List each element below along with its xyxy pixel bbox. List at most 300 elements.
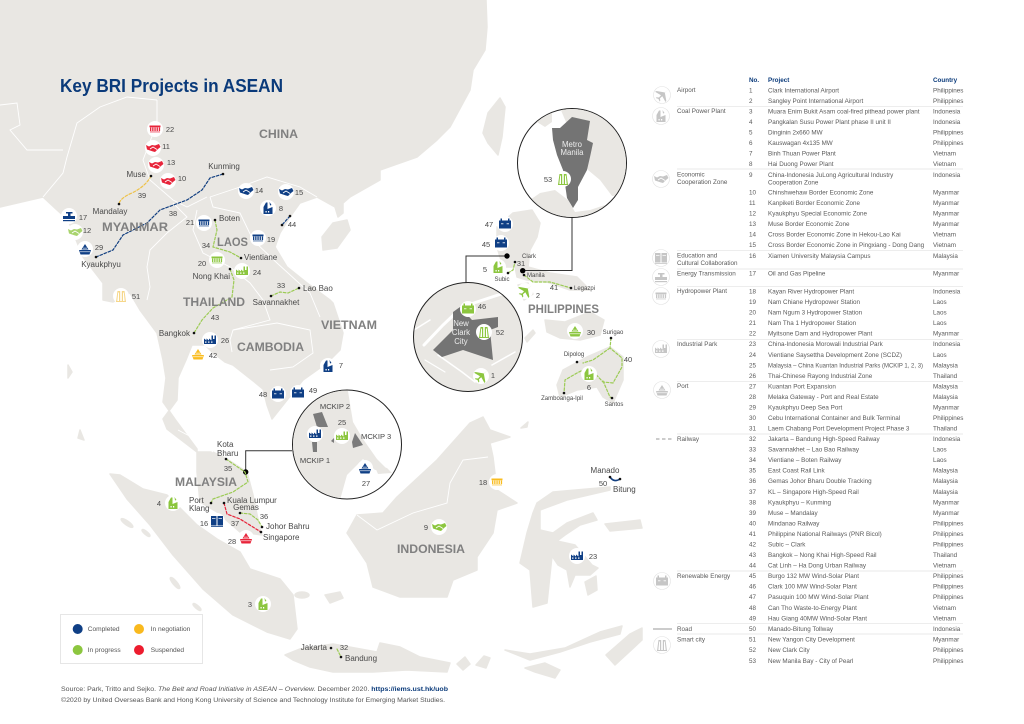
project number labels: 7 bbox=[339, 361, 343, 370]
category: Renewable Energy: Philippines bbox=[933, 594, 963, 601]
category: Economic Cooperation Zone: Muse Border Economic Zone bbox=[768, 221, 850, 228]
icon 42 bbox=[190, 346, 206, 362]
inset: Metro Manila: Manila bbox=[561, 148, 584, 157]
source note: Source: Park, Tritto and Sejko. The Belt and Road Initiative in ASEAN – Overview. December 2020. https://iems.ust.hk/uob bbox=[61, 686, 448, 693]
category: Energy Transmission: Oil and Gas Pipeline bbox=[768, 271, 826, 278]
category: Coal Power Plant: Indonesia bbox=[933, 108, 961, 116]
city labels: Johor Bahru bbox=[266, 522, 310, 531]
category: Economic Cooperation Zone: Chinshwehaw Border Economic Zone bbox=[768, 190, 874, 196]
category: Railway: Myanmar bbox=[933, 510, 959, 517]
city labels: Kuala Lumpur bbox=[227, 496, 277, 505]
Java bbox=[285, 643, 450, 672]
category: Railway: 34 bbox=[749, 457, 757, 464]
category: Railway: 36 bbox=[749, 478, 757, 485]
category: Port bbox=[654, 382, 963, 432]
project number labels: 24 bbox=[253, 268, 261, 277]
city labels: Manila bbox=[527, 273, 545, 279]
country borders bbox=[0, 97, 488, 530]
category: Economic Cooperation Zone: 12 bbox=[749, 211, 757, 218]
category: Railway: Laos bbox=[933, 446, 947, 454]
category: Coal Power Plant: Philippines bbox=[933, 140, 963, 147]
project number labels: 25 bbox=[338, 418, 346, 427]
category: Energy Transmission: Myanmar bbox=[933, 271, 959, 278]
category: Economic Cooperation Zone: Myanmar bbox=[933, 211, 959, 218]
route number labels: 50 bbox=[599, 479, 607, 488]
Taiwan bbox=[483, 98, 505, 155]
inset: MCKIP Kuantan: MCKIP 2 bbox=[320, 402, 350, 411]
category: Railway: 39 bbox=[749, 510, 757, 517]
category: Coal Power Plant: Pangkalan Susu Power Plant phase II unit II bbox=[768, 119, 891, 126]
project number labels: 29 bbox=[95, 243, 103, 252]
category: Railway: Mindanao Railway bbox=[768, 520, 820, 528]
icon 3 bbox=[255, 596, 271, 612]
category: Airport: Philippines bbox=[933, 88, 963, 94]
category: Hydropower Plant: 18 bbox=[749, 288, 757, 296]
icon 18 bbox=[489, 474, 505, 490]
category: Port: Thailand bbox=[933, 426, 958, 432]
category: Railway: Laos bbox=[933, 457, 947, 464]
icon: book bbox=[652, 250, 670, 266]
project icons: in progress (green) bbox=[67, 171, 597, 612]
category: Hydropower Plant: Myanmar bbox=[933, 330, 959, 338]
category: Economic Cooperation Zone: 9 bbox=[749, 172, 753, 179]
route number labels: 38 bbox=[169, 209, 177, 218]
category: Railway: Malaysia bbox=[933, 468, 958, 474]
city labels: Bharu bbox=[217, 449, 238, 458]
category: Renewable Energy: 48 bbox=[749, 605, 757, 612]
project number labels: 17 bbox=[79, 213, 87, 222]
category: Coal Power Plant: Vietnam bbox=[933, 151, 956, 158]
category: Industrial Park: Industrial Park bbox=[677, 341, 718, 348]
legend: Completed bbox=[88, 626, 120, 633]
project number labels: 9 bbox=[424, 523, 428, 532]
project icons: suspended (red) bbox=[145, 121, 254, 546]
category: Port: Kyaukphyu Deep Sea Port bbox=[768, 404, 842, 412]
category: Economic Cooperation Zone: 15 bbox=[749, 242, 757, 249]
category: Port: Kuantan Port Expansion bbox=[768, 384, 836, 390]
category: Coal Power Plant: 7 bbox=[749, 151, 753, 158]
category: Railway: Kyaukphyu – Kunming bbox=[768, 500, 832, 506]
route number labels: 41 bbox=[550, 283, 558, 292]
country labels: INDONESIA bbox=[397, 544, 465, 556]
city labels: Manado bbox=[591, 466, 620, 475]
category: Industrial Park: Laos bbox=[933, 352, 947, 359]
category: Smart city: Myanmar bbox=[933, 636, 959, 644]
icon 16 bbox=[209, 513, 225, 529]
project number labels: 4 bbox=[157, 499, 161, 508]
category: Renewable Energy: Philippines bbox=[933, 584, 963, 590]
city labels: Savannakhet bbox=[253, 298, 300, 307]
category: Education and Cultural Collaboration bbox=[652, 250, 958, 267]
category: Port: Port bbox=[677, 383, 689, 390]
category: Airport: Clark International Airport bbox=[768, 88, 839, 94]
connector to Manila bbox=[523, 217, 572, 270]
project number labels: 12 bbox=[83, 226, 91, 235]
icon 19 bbox=[250, 230, 266, 246]
category: Smart city: Philippines bbox=[933, 647, 963, 654]
category: Port: 28 bbox=[749, 394, 757, 401]
table header: No. bbox=[749, 77, 759, 84]
category: Road: 50 bbox=[749, 626, 757, 633]
icon 17 bbox=[61, 208, 77, 224]
category: Education and Cultural Collaboration: Xiamen University Malaysia Campus bbox=[768, 253, 871, 260]
project number labels: 8 bbox=[279, 204, 283, 213]
project number labels: 30 bbox=[587, 328, 595, 337]
city markers bbox=[95, 173, 621, 658]
category: Railway: Gemas Johor Bharu Double Tracking bbox=[768, 478, 872, 485]
category: Industrial Park: Malaysia – China Kuantan Industrial Parks (MCKIP 1, 2, 3) bbox=[768, 362, 923, 370]
inset: Metro Manila: Metro bbox=[562, 140, 583, 149]
category: Industrial Park: Malaysia bbox=[933, 362, 958, 370]
Borneo bbox=[347, 417, 517, 597]
category: Airport bbox=[654, 86, 963, 105]
icon 6 bbox=[581, 366, 597, 382]
city labels: Boten bbox=[219, 214, 240, 223]
city labels: Bandung bbox=[345, 654, 377, 663]
category: Economic Cooperation Zone: Myanmar bbox=[933, 221, 959, 228]
category: Industrial Park bbox=[652, 340, 961, 380]
category: Railway: Cat Linh – Ha Dong Urban Railway bbox=[768, 562, 867, 570]
project number labels: 49 bbox=[309, 386, 317, 395]
project number labels: 53 bbox=[544, 175, 552, 184]
project number labels: 52 bbox=[496, 328, 504, 337]
country labels: CAMBODIA bbox=[237, 342, 304, 354]
city labels: Bitung bbox=[613, 485, 636, 494]
icon 51 bbox=[113, 288, 129, 304]
category: Renewable Energy: Philippines bbox=[933, 573, 963, 580]
category: Economic Cooperation Zone: Kyaukphyu Special Economic Zone bbox=[768, 211, 868, 218]
icon 12 bbox=[67, 224, 83, 240]
category: Coal Power Plant: 5 bbox=[749, 130, 753, 136]
mainland Asia bbox=[0, 0, 487, 535]
icon: hydropower bbox=[652, 288, 670, 304]
icon 30 bbox=[567, 323, 583, 339]
city labels: Subic bbox=[494, 277, 510, 283]
category: Smart city: 53 bbox=[749, 658, 757, 665]
project number labels: 22 bbox=[166, 125, 174, 134]
category: Port: Malaysia bbox=[933, 384, 958, 390]
category: Railway: Jakarta – Bandung High-Speed Railway bbox=[768, 436, 881, 443]
country labels: CHINA bbox=[259, 129, 298, 141]
table header: Country bbox=[933, 77, 958, 84]
category: Airport: 1 bbox=[749, 88, 753, 94]
category: Education and Cultural Collaboration: Malaysia bbox=[933, 253, 958, 260]
icon 1 bbox=[473, 368, 489, 384]
category: Industrial Park: Vientiane Saysettha Development Zone (SCDZ) bbox=[768, 352, 902, 359]
icon 46 bbox=[460, 301, 476, 317]
icon: road line bbox=[653, 628, 672, 630]
category: Economic Cooperation Zone: Indonesia bbox=[933, 172, 961, 179]
category: Railway: Philippine National Railways (PNR Bicol) bbox=[768, 531, 882, 538]
category: Coal Power Plant: Indonesia bbox=[933, 119, 961, 126]
icon: ship bbox=[654, 382, 670, 398]
route number labels: 39 bbox=[138, 191, 146, 200]
inset: MCKIP Kuantan: MCKIP 1 bbox=[300, 456, 330, 465]
category: Smart city: New Yangon City Development bbox=[768, 636, 855, 644]
category: Railway: 37 bbox=[749, 489, 757, 496]
project number labels: 26 bbox=[221, 336, 229, 345]
inset: New Clark City: Clark bbox=[452, 328, 470, 337]
project number labels: 51 bbox=[132, 292, 140, 301]
project number labels: 10 bbox=[178, 174, 186, 183]
category: Economic Cooperation Zone: Vietnam bbox=[933, 242, 956, 249]
category: Education and Cultural Collaboration: Cultural Collaboration bbox=[677, 260, 738, 267]
project icons: completed (blue) bbox=[61, 183, 585, 564]
project number labels: 18 bbox=[479, 478, 487, 487]
project number labels: 21 bbox=[186, 218, 194, 227]
inset: New Clark City: New bbox=[453, 319, 469, 328]
project number labels: 14 bbox=[255, 186, 263, 195]
category: Road bbox=[653, 626, 961, 633]
route number labels: 31 bbox=[517, 259, 525, 268]
table header: Project bbox=[768, 77, 790, 84]
Sumatra bbox=[110, 474, 297, 639]
icon 7 bbox=[320, 358, 336, 374]
category: Coal Power Plant: Kauswagan 4x135 MW bbox=[768, 140, 833, 147]
category: Smart city: Philippines bbox=[933, 658, 963, 665]
country labels: VIETNAM bbox=[321, 320, 377, 332]
project number labels: 48 bbox=[259, 390, 267, 399]
category: Coal Power Plant: Hai Duong Power Plant bbox=[768, 161, 834, 168]
country labels: LAOS bbox=[217, 237, 248, 249]
route number labels: 32 bbox=[340, 643, 348, 652]
icon 52 bbox=[476, 324, 492, 340]
route number labels: 44 bbox=[288, 220, 296, 229]
city labels: Singapore bbox=[263, 533, 300, 542]
project number labels: 46 bbox=[478, 302, 486, 311]
icon 26 bbox=[202, 332, 218, 348]
category: Port: 30 bbox=[749, 415, 757, 422]
lesser islands bbox=[457, 626, 642, 678]
city labels: Mandalay bbox=[93, 207, 127, 216]
icon 4 bbox=[165, 495, 181, 511]
category: Port: Cebu International Container and Bulk Terminal bbox=[768, 415, 900, 422]
category: Industrial Park: Indonesia bbox=[933, 341, 961, 348]
category: Energy Transmission: 17 bbox=[749, 271, 757, 278]
category: Railway: Vietnam bbox=[933, 562, 956, 570]
icon 47 bbox=[497, 216, 513, 232]
category: Industrial Park: China-Indonesia Morowali Industrial Park bbox=[768, 341, 884, 348]
project number labels: 47 bbox=[485, 220, 493, 229]
project number labels: 20 bbox=[198, 259, 206, 268]
category: Coal Power Plant: 3 bbox=[749, 108, 753, 116]
icon: factory bbox=[652, 340, 670, 358]
category: Economic Cooperation Zone: 11 bbox=[749, 200, 756, 207]
icon 29 bbox=[77, 241, 93, 257]
icon 13 bbox=[148, 157, 164, 173]
category: Renewable Energy: 45 bbox=[749, 573, 757, 580]
icon 8 bbox=[260, 200, 276, 216]
category: Economic Cooperation Zone: Myanmar bbox=[933, 190, 959, 196]
route number labels: 37 bbox=[231, 519, 239, 528]
category: Railway: Subic – Clark bbox=[768, 542, 806, 548]
category: Railway: 41 bbox=[749, 531, 757, 538]
source note: ©2020 by United Overseas Bank and Hong Kong University of Science and Technology Institute for Emerging Market Studies. bbox=[61, 696, 445, 704]
category: Port: 29 bbox=[749, 404, 757, 412]
category: Railway: 33 bbox=[749, 446, 757, 454]
category: Economic Cooperation Zone: Economic bbox=[677, 172, 705, 178]
category: Airport: Sangley Point International Airport bbox=[768, 98, 863, 105]
category: Railway: Myanmar bbox=[933, 500, 959, 506]
route number labels: 40 bbox=[624, 355, 632, 364]
project number labels: 28 bbox=[228, 537, 236, 546]
category: Coal Power Plant: 4 bbox=[749, 119, 753, 126]
category: Renewable Energy: Can Tho Waste-to-Energy Plant bbox=[768, 605, 857, 612]
route number labels: 35 bbox=[224, 464, 232, 473]
icon 22 bbox=[147, 121, 163, 137]
city labels: Dipolog bbox=[564, 352, 584, 358]
category: Smart city: 51 bbox=[749, 636, 757, 644]
category: Coal Power Plant: Vietnam bbox=[933, 161, 956, 168]
category: Hydropower Plant: Nam Chiane Hydropower Station bbox=[768, 299, 861, 306]
category: Port: Melaka Gateway - Port and Real Estate bbox=[768, 394, 879, 401]
category: Renewable Energy: Clark 100 MW Wind-Solar Plant bbox=[768, 584, 857, 590]
category: Railway bbox=[656, 436, 963, 570]
category: Hydropower Plant: Nam Ngum 3 Hydropower Station bbox=[768, 310, 863, 316]
category: Railway: Railway bbox=[677, 436, 700, 443]
category: Smart city: New Manila Bay - City of Pearl bbox=[768, 658, 853, 665]
category: Railway: Bangkok – Nong Khai High-Speed Rail bbox=[768, 552, 877, 559]
category: Coal Power Plant bbox=[652, 108, 963, 168]
inset: New Clark City: City bbox=[454, 337, 468, 346]
category: Hydropower Plant: 19 bbox=[749, 299, 757, 306]
icon 49 bbox=[290, 385, 306, 401]
inset: MCKIP Kuantan: MCKIP 3 bbox=[361, 432, 391, 441]
city labels: Kota bbox=[217, 440, 234, 449]
country labels: PHILIPPINES bbox=[528, 304, 599, 316]
category: Railway: Savannakhet – Lao Bao Railway bbox=[768, 446, 860, 454]
category: Railway: Philippines bbox=[933, 520, 963, 528]
Philippine islands bbox=[497, 210, 590, 290]
category: Economic Cooperation Zone: Cooperation Zone bbox=[768, 180, 819, 186]
icon 28 bbox=[238, 530, 254, 546]
title: Key BRI Projects in ASEAN bbox=[60, 76, 283, 96]
category: Economic Cooperation Zone: Vietnam bbox=[933, 232, 956, 239]
icon 25 bbox=[334, 428, 350, 444]
city labels: Kyaukphyu bbox=[81, 260, 121, 269]
category: Hydropower Plant: 22 bbox=[749, 330, 757, 338]
route number labels: 33 bbox=[277, 281, 285, 290]
project number labels: 27 bbox=[362, 479, 370, 488]
category: Railway: 40 bbox=[749, 520, 757, 528]
category: Hydropower Plant: Laos bbox=[933, 320, 947, 327]
city labels: Santos bbox=[605, 402, 623, 408]
category: Economic Cooperation Zone: China-Indonesia JuLong Agricultural Industry bbox=[768, 172, 894, 179]
country labels bbox=[102, 129, 599, 556]
project table bbox=[652, 77, 963, 665]
category: Port: Laem Chabang Port Development Project Phase 3 bbox=[768, 426, 910, 432]
city labels: Lao Bao bbox=[303, 284, 333, 293]
inset: New Clark City bbox=[414, 253, 524, 392]
category: Hydropower Plant: 20 bbox=[749, 310, 757, 316]
icon: railway dashes bbox=[656, 438, 672, 440]
category: Education and Cultural Collaboration: Education and bbox=[677, 252, 718, 260]
category: Hydropower Plant: Indonesia bbox=[933, 288, 961, 296]
category: Industrial Park: 23 bbox=[749, 341, 757, 348]
legend: Suspended bbox=[151, 647, 184, 654]
category: Hydropower Plant: Nam Tha 1 Hydropower Station bbox=[768, 320, 857, 327]
category: Coal Power Plant: Muara Enim Bukit Asam coal-fired pithead power plant bbox=[768, 108, 920, 116]
category: Economic Cooperation Zone: 13 bbox=[749, 221, 757, 228]
table header bbox=[749, 77, 958, 84]
category: Education and Cultural Collaboration: 16 bbox=[749, 253, 757, 260]
icon: battery bbox=[654, 572, 670, 590]
icon 23 bbox=[569, 548, 585, 564]
category: Economic Cooperation Zone: 10 bbox=[749, 190, 757, 196]
category: Railway: KL – Singapore High-Speed Rail bbox=[768, 489, 859, 496]
category: Road: Manado-Bitung Tollway bbox=[768, 626, 834, 633]
inset: Metro Manila bbox=[518, 108, 630, 273]
icon 27 bbox=[357, 460, 373, 476]
category: Industrial Park: 26 bbox=[749, 373, 757, 380]
city labels: Muse bbox=[126, 170, 147, 179]
category: Railway: 43 bbox=[749, 552, 757, 559]
project number labels: 16 bbox=[200, 519, 208, 528]
category: Renewable Energy: Pasuquin 100 MW Wind-Solar Plant bbox=[768, 594, 869, 601]
category: Renewable Energy: Burgo 132 MW Wind-Solar Plant bbox=[768, 573, 859, 580]
icon: coal plant bbox=[652, 108, 670, 124]
city labels: Kunming bbox=[208, 162, 240, 171]
category: Hydropower Plant bbox=[652, 288, 961, 338]
route number labels: 43 bbox=[211, 313, 219, 322]
category: Coal Power Plant: Coal Power Plant bbox=[677, 108, 726, 115]
icon 21 bbox=[196, 215, 212, 231]
category: Smart city: 52 bbox=[749, 647, 757, 654]
icon 53 bbox=[555, 171, 571, 187]
category: Railway: 44 bbox=[749, 562, 757, 570]
city labels: Bangkok bbox=[159, 329, 191, 338]
icon 9 bbox=[431, 519, 447, 535]
source note bbox=[61, 686, 448, 704]
icon: airport bbox=[654, 86, 670, 104]
project number labels: 6 bbox=[587, 383, 591, 392]
category: Hydropower Plant: Myitsone Dam and Hydropower Plant bbox=[768, 330, 873, 338]
category: Airport: Philippines bbox=[933, 98, 963, 105]
icon 14 bbox=[238, 183, 254, 199]
category: Industrial Park: 24 bbox=[749, 352, 757, 359]
category: Railway: Malaysia bbox=[933, 489, 958, 496]
category: Railway: Thailand bbox=[933, 552, 958, 559]
category: Coal Power Plant: Philippines bbox=[933, 130, 963, 136]
category: Railway: Malaysia bbox=[933, 478, 958, 485]
icon 11 bbox=[145, 140, 161, 156]
category: Railway: Muse – Mandalay bbox=[768, 510, 819, 517]
icon 15 bbox=[278, 184, 294, 200]
project icons: in negotiation (yellow) bbox=[113, 288, 505, 490]
category: Railway: Vientiane – Boten Railway bbox=[768, 457, 842, 464]
category: Renewable Energy bbox=[654, 572, 963, 622]
project number labels: 1 bbox=[491, 371, 495, 380]
icon 10 bbox=[160, 173, 176, 189]
category: Port: 31 bbox=[749, 426, 757, 432]
category: Road: Indonesia bbox=[933, 626, 961, 633]
city labels bbox=[81, 162, 636, 663]
city labels: Legazpi bbox=[574, 286, 595, 292]
country labels: THAILAND bbox=[183, 297, 245, 309]
icon: towers bbox=[654, 636, 670, 654]
category: Port: Myanmar bbox=[933, 404, 959, 412]
category: Hydropower Plant: 21 bbox=[749, 320, 757, 327]
category: Renewable Energy: Vietnam bbox=[933, 616, 956, 622]
city labels: Jakarta bbox=[301, 643, 328, 652]
project number labels: 19 bbox=[267, 235, 275, 244]
category: Railway: Indonesia bbox=[933, 436, 961, 443]
country labels: MYANMAR bbox=[102, 222, 169, 234]
category: Coal Power Plant: Dinginin 2x660 MW bbox=[768, 130, 823, 136]
category: Railway: 35 bbox=[749, 468, 757, 474]
city labels: Clark bbox=[522, 254, 537, 260]
connector to Clark bbox=[466, 256, 507, 283]
